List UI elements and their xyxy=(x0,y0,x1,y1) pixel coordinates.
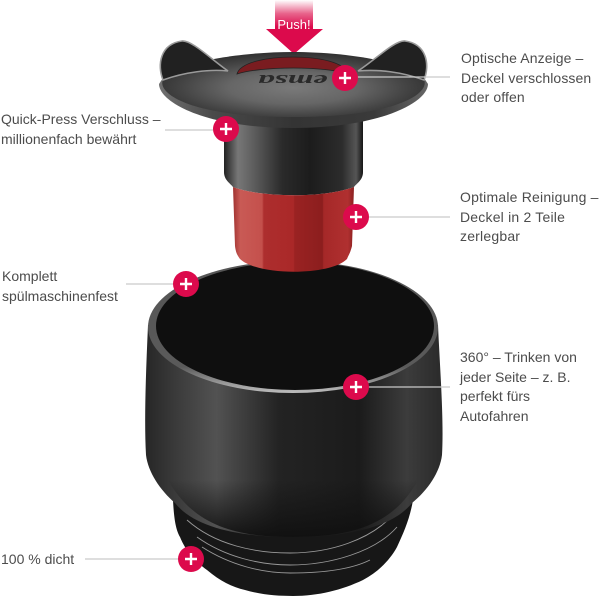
text: dishwasher safe xyxy=(2,268,118,304)
red inner plug xyxy=(233,187,354,272)
text: optimal cleaning: Deckel in 2 Teile xyxy=(460,208,565,224)
text: optimal cleaning xyxy=(460,189,599,244)
text: optical indicator: Optische Anzeige – xyxy=(461,50,583,66)
text: optimal cleaning: Optimale Reinigung – xyxy=(460,189,599,205)
text: optical indicator: oder offen xyxy=(461,89,525,105)
marker: leakproof xyxy=(178,546,204,572)
text: dishwasher safe: spülmaschinenfest xyxy=(2,288,118,304)
marker: cleaning xyxy=(343,204,369,230)
leader lines xyxy=(85,77,450,559)
lid cap xyxy=(159,41,428,128)
text: dishwasher safe: Komplett xyxy=(2,268,57,284)
lid handle: right xyxy=(358,41,427,80)
indicator window xyxy=(237,57,348,74)
text: optimal cleaning: zerlegbar xyxy=(460,228,520,244)
push arrow: Push! xyxy=(277,17,311,32)
text: 360 degree drinking: 360° – Trinken von xyxy=(460,349,577,365)
marker: quick-press xyxy=(213,116,239,142)
text: quick-press closure: millionenfach bewährt xyxy=(1,130,136,146)
text: optical indicator xyxy=(461,50,591,105)
text: leakproof: 100 % dicht xyxy=(1,551,74,567)
text: quick-press closure: Quick-Press Verschluss – xyxy=(1,111,160,127)
text: 360 degree drinking: jeder Seite – z. B. xyxy=(460,368,571,384)
marker: optical indicator xyxy=(332,65,358,91)
marker: dishwasher xyxy=(173,271,199,297)
text: 360 degree drinking: perfekt fürs xyxy=(460,388,530,404)
lid handle: left xyxy=(160,41,228,80)
lid neck xyxy=(224,118,363,195)
text: 360 degree drinking xyxy=(460,349,577,424)
text: 360 degree drinking: Autofahren xyxy=(460,408,528,424)
lid logo: emsa xyxy=(258,71,328,90)
cup body xyxy=(145,261,443,537)
marker: 360 drinking xyxy=(343,374,369,400)
text: quick-press closure xyxy=(1,111,161,146)
push arrow xyxy=(266,0,323,54)
text: optical indicator: Deckel verschlossen xyxy=(461,70,591,86)
cup lower thread section xyxy=(173,500,413,596)
